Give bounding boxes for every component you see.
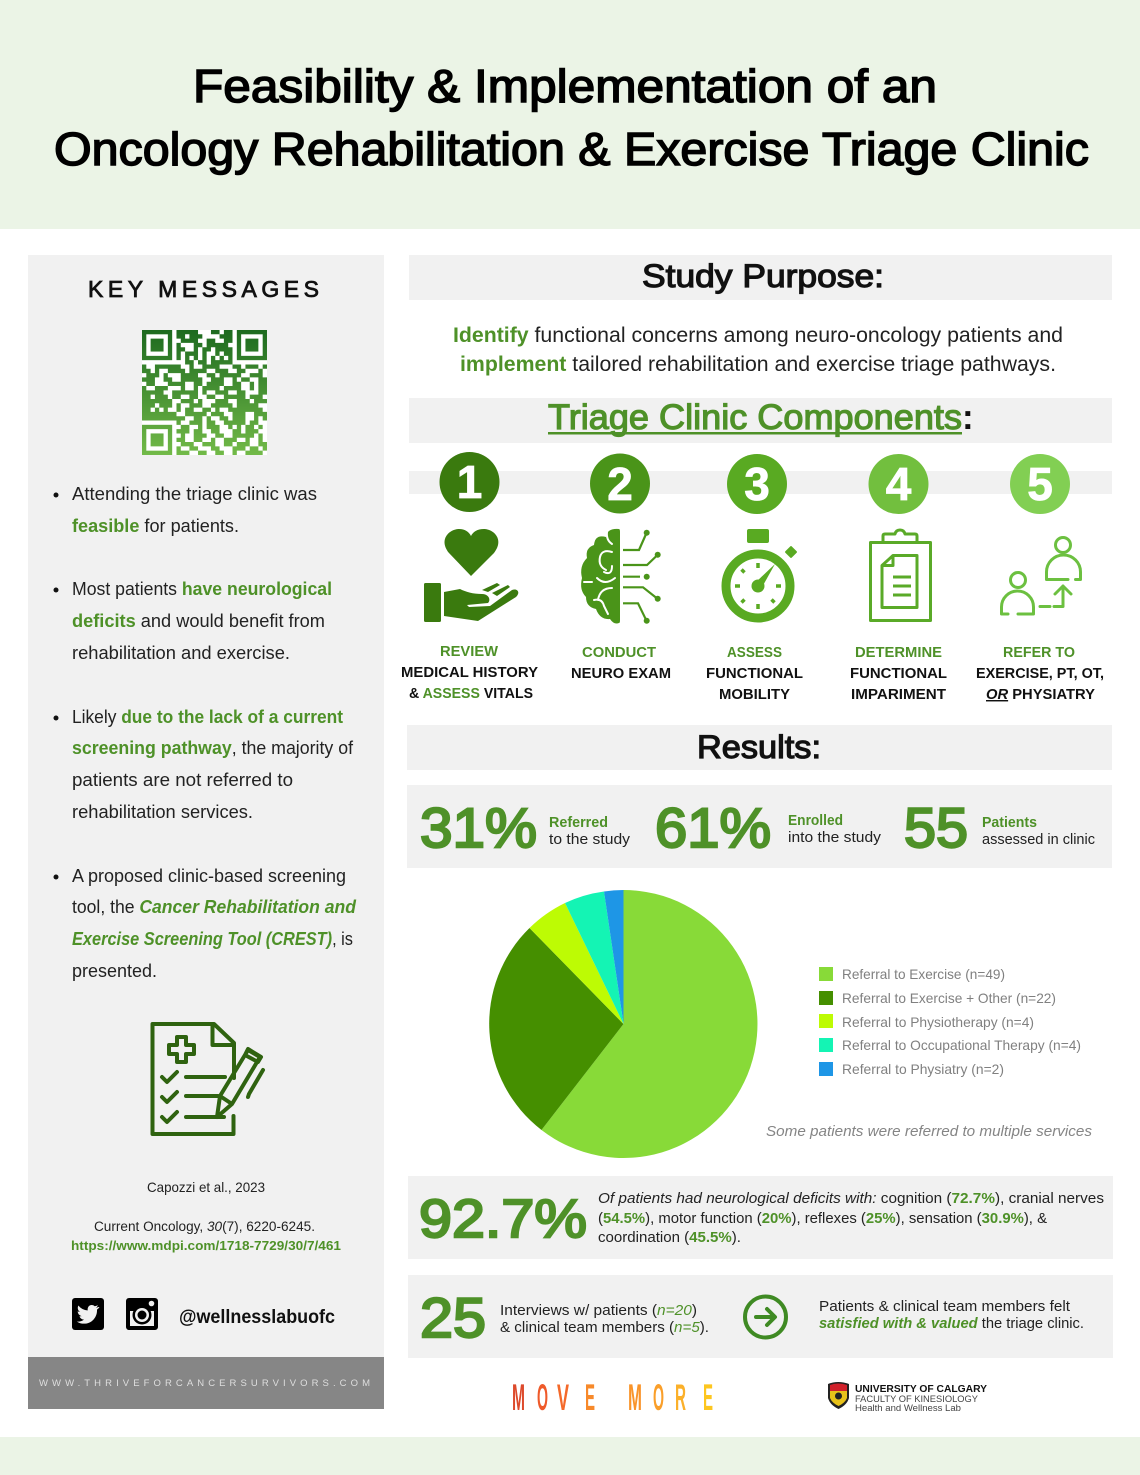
step 5: refer: 5 — [1027, 458, 1053, 510]
citation — [71, 1179, 341, 1253]
step 2 label: CONDUCT — [582, 645, 656, 661]
step 2 label — [571, 645, 671, 682]
icon: stopwatch — [726, 529, 797, 618]
step 5 label: REFER TO — [1003, 645, 1075, 661]
move more logo: M — [512, 1377, 525, 1418]
key message bullets: screening pathway, the majority of — [72, 738, 354, 758]
move more logo: R — [675, 1377, 686, 1418]
step 2: neuro exam — [571, 454, 671, 682]
pie chart: referrals — [489, 890, 757, 1158]
header band — [0, 0, 1140, 229]
stat: 92.7%: 92.7% — [419, 1189, 587, 1249]
website bar — [28, 1357, 384, 1409]
deficits text: (54.5%), motor function (20%), reflexes (25%), sensation (30.9%), & — [598, 1210, 1047, 1227]
key messages heading: KEY MESSAGES — [88, 276, 319, 302]
icon: instagram — [126, 1298, 158, 1330]
pie legend: Referral to Exercise (n=49) — [842, 966, 1005, 982]
step 1 label: MEDICAL HISTORY — [401, 665, 538, 681]
stat: 61% enrolled: into the study — [788, 830, 882, 846]
panel: headline statistics — [407, 785, 1112, 868]
stat: 31% referred: to the study — [549, 832, 631, 848]
stat: 61% enrolled: 61% — [655, 796, 771, 859]
step 1: review — [401, 452, 538, 702]
key message bullets: A proposed clinic-based screening — [72, 866, 346, 886]
key message bullets: Attending the triage clinic was — [72, 484, 317, 504]
interviews text: & clinical team members ( n=5). — [500, 1320, 709, 1336]
university of calgary logo: UNIVERSITY OF CALGARY — [855, 1383, 987, 1395]
step 2 label: NEURO EXAM — [571, 666, 671, 682]
deficits text: Of patients had neurological deficits with: cognition (72.7%), cranial nerves — [598, 1190, 1104, 1207]
citation: https://www.mdpi.com/1718-7729/30/7/461 — [71, 1238, 341, 1253]
panel: neurological deficits — [408, 1176, 1113, 1259]
key message bullets: Exercise Screening Tool (CREST), is — [72, 929, 353, 949]
key message bullets: rehabilitation and exercise. — [72, 643, 290, 663]
stat: 31% referred — [420, 796, 631, 859]
move more logo: O — [537, 1377, 548, 1418]
QR code — [142, 330, 267, 455]
citation: Capozzi et al., 2023 — [147, 1179, 265, 1195]
move more logo — [512, 1377, 713, 1418]
panel: interviews — [408, 1275, 1113, 1358]
panel: triage clinic heading: Triage Clinic Components — [548, 398, 962, 437]
icon: checklist document with pen — [152, 1024, 263, 1134]
stat: 61% enrolled: Enrolled — [788, 813, 843, 829]
step 4 label: FUNCTIONAL — [850, 666, 947, 682]
footer band — [0, 1437, 1140, 1475]
step 4 label: IMPARIMENT — [851, 687, 946, 703]
interviews text — [500, 1303, 709, 1336]
study purpose text — [453, 324, 1063, 376]
step 4: functional impairment: 4 — [886, 458, 912, 510]
stat: 31% referred: Referred — [549, 815, 608, 831]
move more logo: O — [653, 1377, 664, 1418]
stat: 31% referred: 31% — [420, 796, 537, 859]
citation: Current Oncology, 30(7), 6220-6245. — [94, 1219, 315, 1234]
key message bullets: rehabilitation services. — [72, 802, 253, 822]
deficits text — [598, 1190, 1104, 1246]
panel: triage clinic heading: : — [962, 398, 974, 437]
stat: 55 patients — [904, 796, 1095, 859]
study purpose text: Identify functional concerns among neuro-oncology patients and — [453, 324, 1063, 347]
step 3 label: MOBILITY — [719, 687, 790, 703]
icon: heart in hand — [424, 529, 518, 622]
interviews text: Interviews w/ patients ( n=20) — [500, 1303, 697, 1319]
study purpose text: implement tailored rehabilitation and exercise triage pathways. — [460, 353, 1056, 376]
icon: twitter — [72, 1298, 104, 1330]
pie legend: Referral to Exercise + Other (n=22) — [842, 990, 1056, 1006]
panel: study purpose — [409, 255, 1112, 300]
satisfaction text: Patients & clinical team members felt — [819, 1299, 1070, 1315]
icon: crest — [828, 1382, 849, 1409]
step 1 label — [401, 644, 538, 702]
website bar: WWW.THRIVEFORCANCERSURVIVORS.COM — [39, 1378, 370, 1389]
step 5 label: EXERCISE, PT, OT, — [976, 666, 1104, 682]
move more logo: V — [557, 1377, 569, 1418]
step 3 label: ASSESS — [727, 645, 782, 661]
key message bullets: Likely due to the lack of a current — [72, 707, 343, 727]
deficits text: coordination (45.5%). — [598, 1229, 741, 1246]
satisfaction text: satisfied with & valued the triage clinic. — [819, 1316, 1084, 1332]
step 3: functional mobility — [706, 454, 803, 703]
stat: 55 patients: assessed in clinic — [982, 832, 1095, 848]
step 2: neuro exam: 2 — [607, 458, 633, 510]
icon: brain circuit — [581, 529, 661, 624]
text: E — [703, 1377, 713, 1418]
key message bullets: tool, the Cancer Rehabilitation and — [72, 897, 357, 917]
university of calgary logo — [828, 1382, 987, 1414]
step 3 label — [706, 645, 803, 703]
step 5: refer — [976, 454, 1104, 703]
title — [54, 60, 1089, 175]
satisfaction text — [819, 1299, 1084, 1332]
key message bullets — [54, 484, 357, 981]
step 5 label: OR PHYSIATRY — [986, 687, 1095, 703]
step 5 label — [976, 645, 1104, 703]
panel: triage clinic heading — [409, 398, 1112, 494]
step 1: review: 1 — [457, 456, 482, 508]
step 3: functional mobility: 3 — [744, 458, 770, 510]
pie legend: Referral to Occupational Therapy (n=4) — [842, 1037, 1081, 1053]
stat: 55 patients: Patients — [982, 815, 1037, 831]
panel: results heading — [407, 725, 1112, 770]
stat: 25: 25 — [420, 1286, 486, 1349]
title: Oncology Rehabilitation & Exercise Triage Clinic — [54, 123, 1089, 175]
pie legend: Referral to Physiotherapy (n=4) — [842, 1014, 1034, 1030]
panel: key messages — [28, 255, 384, 1357]
key message bullets: patients are not referred to — [72, 770, 293, 790]
stat: 61% enrolled — [655, 796, 882, 859]
step 4 label — [850, 645, 947, 703]
icon: arrow in circle — [745, 1296, 786, 1338]
icon: two people with arrow — [1002, 538, 1080, 614]
title: Feasibility & Implementation of an — [193, 60, 937, 112]
step 4: functional impairment — [850, 454, 947, 703]
pie note: Some patients were referred to multiple services — [766, 1123, 1092, 1140]
step 1 label: REVIEW — [440, 644, 498, 660]
key message bullets: Most patients have neurological — [72, 579, 332, 599]
pie legend — [819, 966, 1081, 1077]
social handle: @wellnesslabuofc — [179, 1307, 335, 1328]
step 3 label: FUNCTIONAL — [706, 666, 803, 682]
pie legend: Referral to Physiatry (n=2) — [842, 1061, 1004, 1077]
key message bullets: feasible for patients. — [72, 516, 239, 536]
university of calgary logo: FACULTY OF KINESIOLOGY — [855, 1394, 979, 1405]
step 4 label: DETERMINE — [855, 645, 942, 661]
key message bullets: presented. — [72, 961, 157, 981]
move more logo: E — [585, 1377, 595, 1418]
move more logo: M — [628, 1377, 642, 1418]
step 1 label: & ASSESS VITALS — [409, 686, 533, 702]
stat: 55 patients: 55 — [904, 796, 968, 859]
study purpose heading: Study Purpose: — [642, 258, 884, 294]
key message bullets: deficits and would benefit from — [72, 611, 325, 631]
icon: clipboard — [870, 530, 930, 620]
panel: results heading: Results: — [697, 729, 821, 765]
university of calgary logo: Health and Wellness Lab — [855, 1403, 961, 1414]
